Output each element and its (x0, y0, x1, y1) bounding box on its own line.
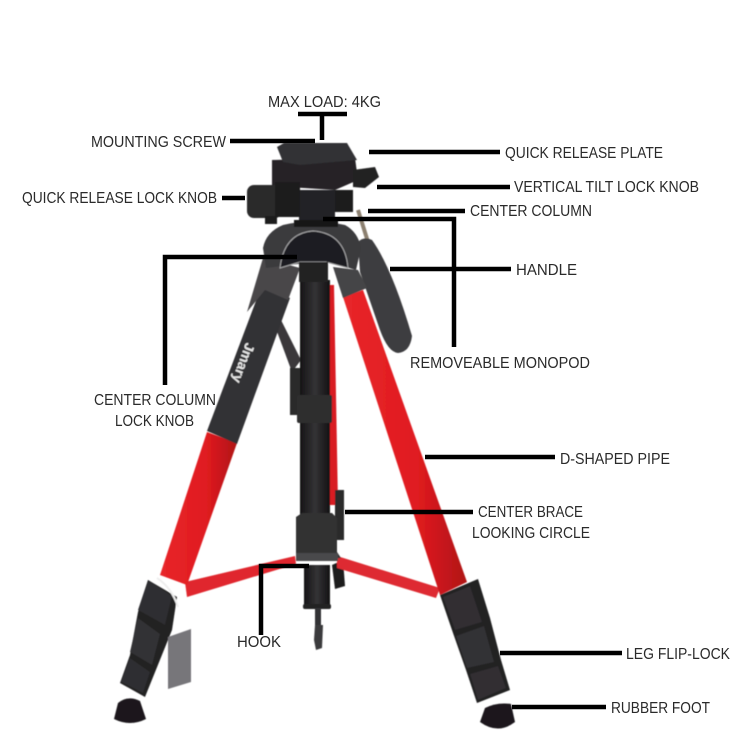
line: d-shaped pipe (425, 455, 555, 459)
label: quick release lock knob: QUICK RELEASE LOCK KNOB (22, 190, 217, 207)
line: max load (298, 114, 347, 140)
leg bracket (272, 316, 301, 415)
line: quick release lock knob (222, 196, 245, 200)
right leg (343, 290, 467, 595)
label: center column lock knob: CENTER COLUMN (94, 392, 216, 409)
tripod photo (114, 143, 515, 728)
left leg: Jmary (229, 341, 258, 385)
center brace left (185, 556, 296, 597)
leg hubs (247, 258, 367, 312)
right rubber foot (480, 704, 515, 728)
tag (168, 629, 191, 689)
label: handle: HANDLE (516, 262, 577, 279)
column collar and lower column (296, 513, 341, 650)
center column (297, 280, 344, 540)
line: rubber foot (512, 705, 606, 709)
line: mounting screw (230, 139, 315, 143)
label: center column lock knob: LOCK KNOB (115, 413, 194, 430)
label: center column: CENTER COLUMN (470, 203, 592, 220)
left leg (160, 285, 290, 585)
label: hook: HOOK (237, 634, 282, 651)
rear leg (328, 285, 345, 589)
label: quick release plate: QUICK RELEASE PLATE (505, 145, 663, 162)
label: center brace looking circle: CENTER BRACE (478, 504, 583, 521)
line: leg flip-lock (500, 651, 622, 655)
label: center column lock knob (94, 392, 216, 430)
label: center brace looking circle: LOOKING CIRCLE (472, 525, 590, 542)
line: center column (368, 209, 465, 213)
line: center brace (345, 510, 473, 514)
label: vertical tilt lock knob: VERTICAL TILT LOCK KNOB (514, 179, 699, 196)
line: center column lock knob (165, 257, 297, 385)
line: vertical tilt lock knob (377, 185, 510, 189)
label: removeable monopod: REMOVEABLE MONOPOD (410, 355, 590, 372)
line: quick release plate (369, 150, 500, 154)
leader lines (165, 114, 622, 707)
label: leg flip-lock: LEG FLIP-LOCK (626, 646, 731, 663)
left rubber foot (114, 698, 146, 723)
line: removeable monopod (323, 219, 454, 347)
label: d-shaped pipe: D-SHAPED PIPE (560, 451, 670, 468)
label: rubber foot: RUBBER FOOT (611, 700, 710, 717)
dome hub (263, 222, 361, 270)
label: max load: MAX LOAD: 4KG (268, 94, 381, 111)
line: handle (390, 267, 511, 271)
pan head (247, 143, 379, 227)
handle (358, 210, 412, 353)
label: mounting screw: MOUNTING SCREW (91, 134, 226, 151)
left flip lock (120, 578, 178, 697)
right flip lock (440, 579, 510, 703)
label: center brace looking circle (472, 504, 590, 542)
center brace right (337, 556, 440, 598)
line: hook (261, 566, 309, 635)
